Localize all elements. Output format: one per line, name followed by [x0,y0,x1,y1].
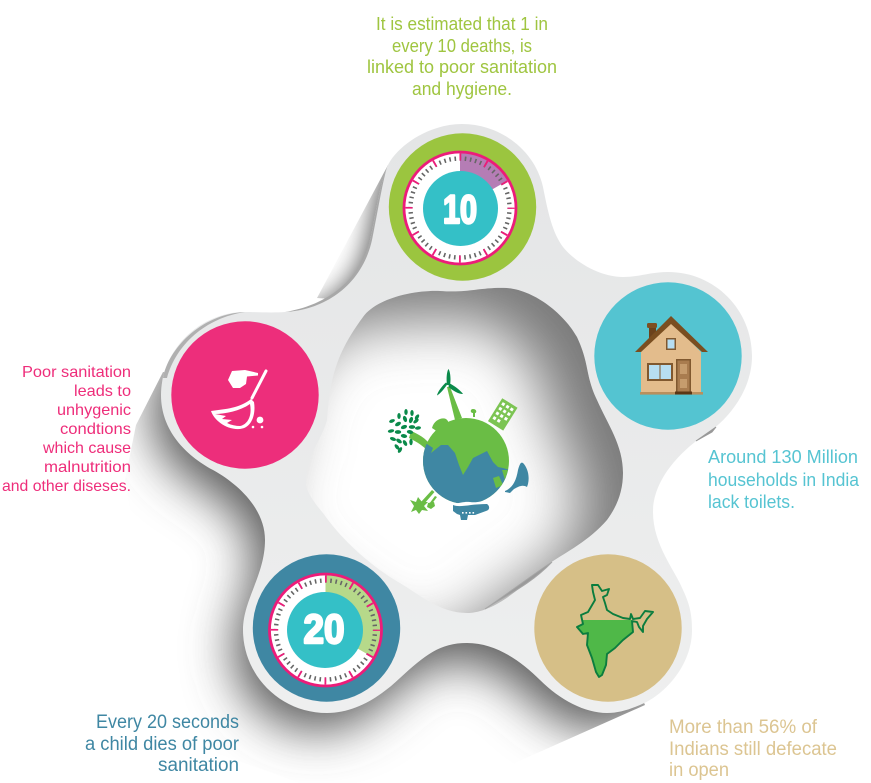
pink disc [171,321,319,469]
text: top caption: It is estimated that 1 in [376,14,548,34]
panel: India map circle [534,554,682,702]
tree [388,409,431,454]
text: lower left caption: a child dies of poor [85,734,240,755]
text: lower left caption [85,712,240,776]
text: left caption: condtions [60,421,131,438]
edge around broom lobe [163,312,245,378]
text: left caption: leads to [74,383,131,400]
pink rim [404,152,516,264]
five minute ticks [274,579,376,681]
purple sector [460,151,509,208]
text: right caption: lack toilets. [708,491,795,512]
text: right caption: Around 130 Million [708,446,858,467]
globe water [423,444,508,503]
gauge outer ring [389,133,536,281]
text: top caption: every 10 deaths, is [392,36,532,56]
white wave at foot of globe [450,500,489,505]
cast shadow: upper left wedge [317,165,388,298]
tan disc [534,554,682,702]
edge of upper left neck [285,167,387,312]
text: top caption: and hygiene. [412,79,512,99]
number 10: 10 [443,188,477,232]
text: left caption: and other diseses. [2,478,131,495]
text: lower left caption: sanitation [158,755,239,776]
illustration: globe with surroundings [388,369,529,520]
cast shadow: left side and bottom [128,372,645,766]
palm [410,490,437,514]
panel: top gauge 1 in 10 [389,133,536,281]
text: lower right caption: in open [669,760,729,781]
icon: India map [577,585,653,677]
panel: house circle [594,282,742,430]
pink rim [270,574,382,686]
panel: broom circle [171,321,319,469]
panel: bottom gauge 20 seconds [253,554,400,702]
icon: house [635,316,708,395]
five minute ticks [409,157,511,259]
panel: central ring shape [161,124,752,713]
teal centre [287,592,363,668]
minute ticks [276,580,375,680]
text: lower right caption [669,717,837,781]
teal centre [423,171,498,246]
gauge face [403,151,517,265]
text: left caption: which cause [42,440,131,457]
text: lower left caption: Every 20 seconds [96,712,239,733]
inner shadow of cut-out [306,288,623,613]
text: lower right caption: Indians still defecate [669,739,837,760]
gauge face [268,573,382,687]
teal disc [594,282,742,430]
ship [453,504,489,520]
green sector [326,573,383,658]
text: right caption: households in India [708,469,860,490]
wind turbine [437,369,463,420]
globe land [423,418,509,504]
globe land: lower right islands [493,470,508,488]
text: left caption: malnutrition [44,459,131,476]
icon: hand and broom [211,370,266,429]
gauge outer ring [253,554,400,702]
inner cut-out [306,288,623,613]
text: right caption [708,446,860,512]
minute ticks [410,158,510,258]
building [488,398,518,431]
crease at lower right of cut-out [485,562,552,609]
edge at right neck [696,427,716,441]
text: top caption: linked to poor sanitation [367,57,557,77]
text: top caption [367,14,557,99]
text: left caption: unhygenic [57,402,131,419]
car and small tree on globe [432,409,476,432]
text: left caption: Poor sanitation [22,364,131,381]
number 20: 20 [304,606,344,652]
text: lower right caption: More than 56% of [669,717,818,738]
text: left caption [2,364,131,495]
dolphin [505,463,529,493]
